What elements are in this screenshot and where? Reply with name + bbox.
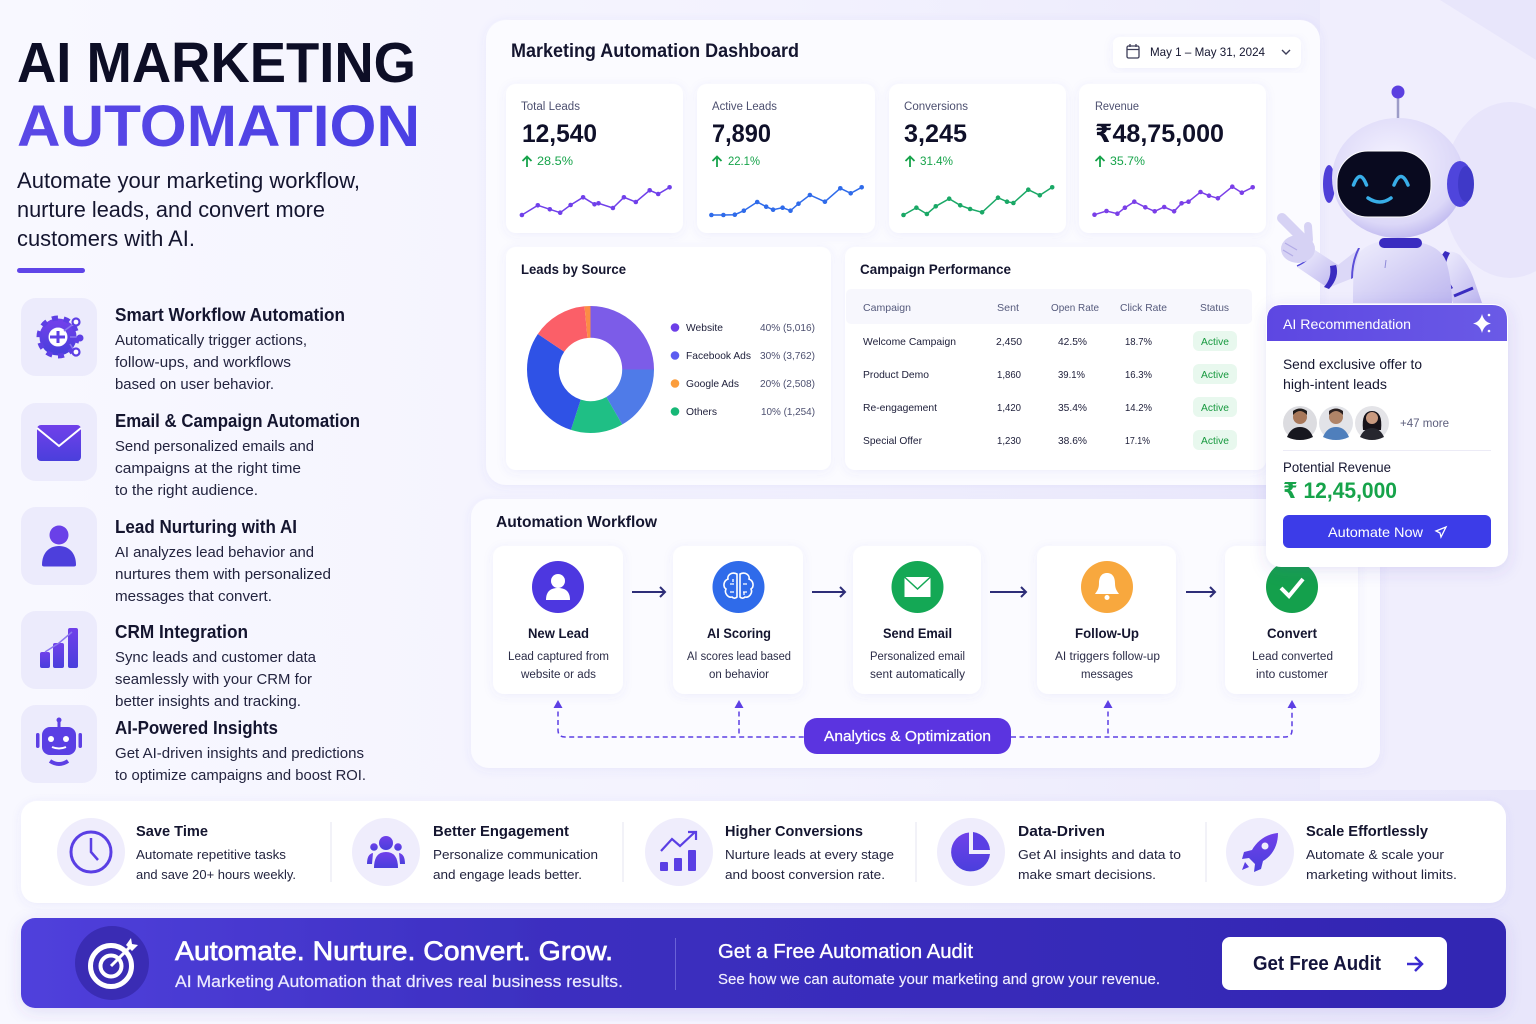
feature: smart workflow automation: Automatically trigger actions, — [115, 332, 307, 349]
AI recommendation card — [1266, 304, 1508, 567]
step: send email: sent automatically — [870, 669, 965, 681]
step: follow-up: AI triggers follow-up — [1055, 651, 1160, 663]
table rows: 18.7% — [1125, 336, 1152, 348]
legend: 10% (1,254) — [761, 406, 815, 418]
call to action banner: AI Marketing Automation that drives real business results. — [175, 972, 623, 991]
step: AI scoring: AI scores lead based — [687, 651, 791, 663]
legend — [671, 322, 815, 418]
step: send email: Send Email — [883, 625, 952, 641]
table rows: Active — [1201, 336, 1229, 348]
head — [1323, 165, 1335, 203]
avatars — [1283, 406, 1389, 440]
AI recommendation card: high-intent leads — [1283, 376, 1387, 392]
table rows: 2,450 — [996, 336, 1022, 348]
benefit: better engagement: Better Engagement — [433, 823, 569, 840]
table rows: Active — [1201, 402, 1229, 414]
donut chart — [543, 322, 638, 417]
sparkline — [904, 187, 1052, 215]
date selector — [1113, 37, 1301, 68]
benefit: data-driven — [937, 818, 1181, 886]
feature: CRM integration: better insights and tracking. — [115, 693, 301, 710]
benefit: better engagement: Personalize communication — [433, 847, 598, 862]
subtitle: nurture leads, and convert more — [17, 197, 325, 222]
benefits strip — [21, 801, 1506, 903]
automate now button: Automate Now — [1328, 524, 1424, 540]
call to action banner: Get a Free Automation Audit — [718, 941, 973, 963]
feature: email and campaign automation: Email & Campaign Automation — [115, 411, 360, 431]
AI recommendation card: AI Recommendation — [1283, 316, 1411, 332]
KPI card: conversions: Conversions — [904, 101, 968, 113]
table rows: 1,230 — [997, 435, 1021, 447]
call to action banner — [21, 918, 1506, 1008]
legend: Facebook Ads — [686, 350, 751, 362]
get free audit button — [1222, 937, 1447, 990]
feature: CRM integration: CRM Integration — [115, 622, 248, 642]
feature: AI-powered insights: AI-Powered Insights — [115, 718, 278, 738]
KPI card: active leads — [697, 84, 875, 233]
KPI card: revenue — [1079, 84, 1266, 233]
table rows: 14.2% — [1125, 402, 1152, 414]
arrow — [812, 587, 845, 597]
panel: campaign performance table: Click Rate — [1120, 302, 1167, 314]
date selector: May 1 – May 31, 2024 — [1150, 45, 1265, 59]
table rows: Re-engagement — [863, 402, 937, 414]
table rows: Active — [1201, 435, 1229, 447]
step: follow-up: messages — [1081, 669, 1133, 681]
benefit: scale effortlessly — [1226, 818, 1457, 886]
benefit: better engagement: and engage leads better. — [433, 867, 582, 882]
KPI card: revenue: 35.7% — [1110, 154, 1145, 168]
benefit: data-driven: make smart decisions. — [1018, 867, 1156, 882]
benefit: scale effortlessly: marketing without limits. — [1306, 867, 1457, 882]
arrow — [990, 587, 1026, 597]
panel: campaign performance table: Status — [1200, 302, 1229, 314]
AI recommendation card: +47 more — [1400, 418, 1449, 430]
feature: lead nurturing with AI: nurtures them with personalized — [115, 566, 331, 583]
analytics pill — [804, 718, 1011, 754]
KPI card: active leads: 7,890 — [712, 120, 771, 148]
icon: person — [42, 526, 76, 566]
step: AI scoring — [673, 546, 803, 694]
table rows: 39.1% — [1058, 369, 1085, 381]
left arm — [1328, 248, 1360, 288]
get free audit button: Get Free Audit — [1253, 953, 1381, 975]
benefit: data-driven: Get AI insights and data to — [1018, 847, 1181, 862]
benefit: save time — [57, 818, 296, 886]
icon: sparkle — [1473, 314, 1491, 333]
AI recommendation card: Potential Revenue — [1283, 460, 1391, 475]
benefit: data-driven: Data-Driven — [1018, 823, 1105, 840]
panel: campaign performance table — [845, 247, 1266, 470]
torso — [1353, 240, 1452, 303]
feature: smart workflow automation — [21, 298, 345, 393]
icon: target — [75, 926, 149, 1000]
KPI card: total leads: Total Leads — [521, 101, 580, 113]
KPI card: conversions — [889, 84, 1066, 233]
KPI card: active leads: 22.1% — [728, 154, 760, 168]
AI recommendation card: ₹ 12,45,000 — [1283, 478, 1397, 503]
robot mascot — [1281, 86, 1482, 303]
automate now button — [1283, 515, 1491, 548]
table rows: 1,860 — [997, 369, 1021, 381]
panel: campaign performance table: Campaign Performance — [860, 261, 1011, 277]
feature: AI-powered insights — [21, 705, 366, 784]
table rows: 1,420 — [997, 402, 1021, 414]
sparkline — [1094, 187, 1253, 215]
feature: AI-powered insights: Get AI-driven insights and predictions — [115, 745, 364, 762]
step: convert: Convert — [1267, 625, 1317, 641]
table rows: Welcome Campaign — [863, 336, 956, 348]
KPI card: conversions: 31.4% — [920, 154, 953, 168]
benefit: higher conversions: Higher Conversions — [725, 823, 863, 840]
step: convert: into customer — [1256, 669, 1328, 681]
feature: AI-powered insights: to optimize campaigns and boost ROI. — [115, 767, 366, 784]
icon: bars — [40, 628, 78, 668]
feature: lead nurturing with AI — [21, 507, 331, 605]
legend: 40% (5,016) — [760, 322, 815, 334]
KPI card: total leads: 28.5% — [537, 154, 573, 168]
feature: smart workflow automation: Smart Workflow Automation — [115, 305, 345, 325]
benefit: higher conversions — [645, 818, 894, 886]
step: follow-up: Follow-Up — [1075, 625, 1139, 641]
feature: email and campaign automation: campaigns at the right time — [115, 460, 301, 477]
feature: email and campaign automation — [21, 403, 360, 499]
feature: smart workflow automation: follow-ups, and workflows — [115, 354, 291, 371]
feature: lead nurturing with AI: AI analyzes lead behavior and — [115, 544, 314, 561]
legend: Others — [686, 406, 717, 418]
step: new lead: New Lead — [528, 625, 589, 641]
legend: 20% (2,508) — [760, 378, 815, 390]
step: AI scoring: AI Scoring — [707, 625, 771, 641]
table rows: 35.4% — [1058, 402, 1087, 414]
KPI card: revenue: Revenue — [1095, 101, 1139, 113]
benefit: scale effortlessly: Automate & scale your — [1306, 847, 1445, 862]
arrow — [1186, 587, 1215, 597]
KPI card: conversions: 3,245 — [904, 120, 967, 148]
arrow — [632, 587, 665, 597]
benefit: better engagement — [352, 818, 598, 886]
dashboard heading: Marketing Automation Dashboard — [511, 41, 799, 62]
table rows: 16.3% — [1125, 369, 1152, 381]
step: convert: Lead converted — [1252, 651, 1333, 663]
icon: gear workflow — [39, 318, 84, 356]
AI recommendation card: Send exclusive offer to — [1283, 356, 1422, 372]
benefit: higher conversions: Nurture leads at every stage — [725, 847, 894, 862]
panel: leads by source: Leads by Source — [521, 261, 626, 277]
subtitle: customers with AI. — [17, 226, 195, 251]
feature: CRM integration — [21, 611, 317, 710]
feedback connectors — [554, 700, 1296, 737]
feature: CRM integration: Sync leads and customer data — [115, 649, 317, 666]
table rows: Active — [1201, 369, 1229, 381]
feature: lead nurturing with AI: messages that convert. — [115, 588, 272, 605]
analytics pill: Analytics & Optimization — [824, 728, 991, 745]
benefit: save time: Save Time — [136, 823, 208, 840]
title: AUTOMATION — [17, 94, 420, 159]
table rows: 38.6% — [1058, 435, 1087, 447]
panel: campaign performance table: Sent — [997, 302, 1019, 314]
face screen — [1337, 151, 1431, 217]
panel: campaign performance table: Open Rate — [1051, 302, 1099, 314]
step: follow-up — [1037, 546, 1176, 694]
icon: robot — [36, 718, 82, 764]
feature: CRM integration: seamlessly with your CRM for — [115, 671, 312, 688]
table rows: 17.1% — [1125, 435, 1150, 447]
table rows: Product Demo — [863, 369, 929, 381]
icon: envelope — [37, 425, 81, 461]
title — [17, 31, 420, 159]
call to action banner: See how we can automate your marketing and grow your revenue. — [718, 971, 1160, 988]
table rows: 42.5% — [1058, 336, 1087, 348]
legend: 30% (3,762) — [760, 350, 815, 362]
panel: dashboard — [486, 20, 1320, 485]
KPI card: total leads: 12,540 — [522, 120, 597, 148]
right arm — [1440, 251, 1482, 303]
panel: campaign performance table: Campaign — [863, 302, 911, 314]
step: new lead: website or ads — [520, 669, 596, 681]
subtitle: Automate your marketing workflow, — [17, 168, 360, 193]
legend: Google Ads — [686, 378, 739, 390]
subtitle — [17, 168, 360, 251]
feature: email and campaign automation: to the right audience. — [115, 482, 258, 499]
benefit: higher conversions: and boost conversion rate. — [725, 867, 885, 882]
KPI card: total leads — [506, 84, 683, 233]
step: AI scoring: on behavior — [709, 669, 769, 681]
panel: leads by source — [506, 247, 831, 470]
panel: automation workflow: Automation Workflow — [496, 514, 658, 531]
step: send email: Personalized email — [870, 651, 965, 663]
step: new lead: Lead captured from — [508, 651, 609, 663]
step: send email — [853, 546, 981, 694]
KPI card: revenue: ₹48,75,000 — [1095, 120, 1224, 148]
benefit: save time: and save 20+ hours weekly. — [136, 867, 296, 882]
step: new lead — [493, 546, 623, 694]
sparkline — [711, 187, 862, 215]
title: AI MARKETING — [17, 31, 416, 95]
KPI card: active leads: Active Leads — [712, 101, 777, 113]
sparkline — [522, 187, 670, 215]
legend: Website — [686, 322, 723, 334]
feature: smart workflow automation: based on user behavior. — [115, 376, 274, 393]
benefit: scale effortlessly: Scale Effortlessly — [1306, 823, 1429, 840]
feature: lead nurturing with AI: Lead Nurturing with AI — [115, 517, 297, 537]
step: convert — [1225, 546, 1358, 694]
benefit: save time: Automate repetitive tasks — [136, 847, 287, 862]
panel: automation workflow — [471, 499, 1380, 768]
feature: email and campaign automation: Send personalized emails and — [115, 438, 314, 455]
table rows — [863, 331, 1237, 450]
hand — [1281, 218, 1315, 263]
table rows: Special Offer — [863, 435, 922, 447]
call to action banner: Automate. Nurture. Convert. Grow. — [175, 936, 613, 966]
collar — [1379, 238, 1422, 248]
